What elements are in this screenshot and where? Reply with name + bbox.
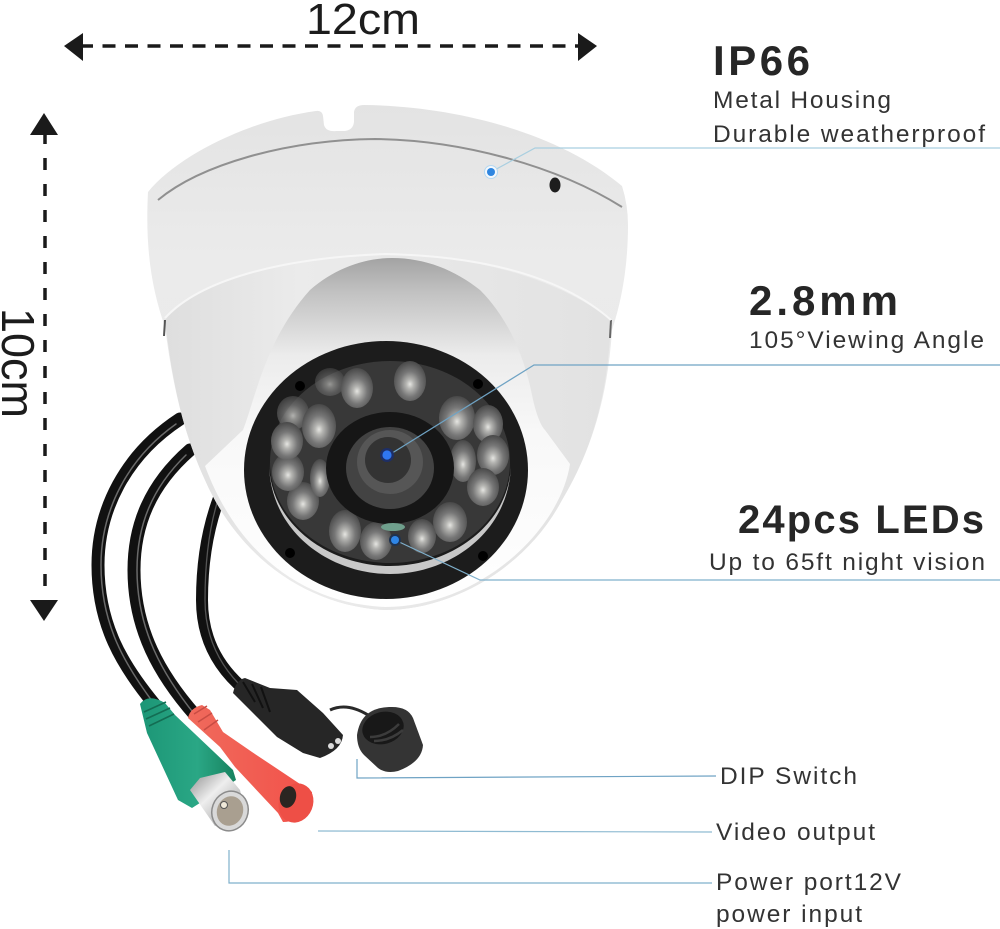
callout: IP66 metal housing: [484, 37, 1000, 178]
callout: IP66 metal housing: IP66: [713, 37, 810, 84]
connector: green BNC: [140, 698, 254, 836]
dimension: width 12cm: [64, 0, 597, 61]
groove: [158, 139, 622, 207]
cables: [98, 419, 245, 715]
camera: dome housing: [147, 105, 628, 610]
outer housing silhouette: [147, 105, 628, 610]
callout: 24pcs LEDs: [389, 498, 1000, 580]
callout: 2.8mm lens: 105°Viewing Angle: [749, 327, 984, 354]
callout: power port: Power port12V: [716, 869, 902, 896]
callout: 24pcs LEDs: Up to 65ft night vision: [709, 549, 985, 576]
callout: DIP switch: DIP Switch: [720, 763, 857, 790]
callout: IP66 metal housing: Durable weatherproof: [713, 121, 985, 148]
connector: red power jack: [188, 705, 319, 828]
lower ring: [165, 254, 611, 610]
callout: 2.8mm lens: [380, 277, 1000, 462]
callout: power port: [229, 850, 902, 928]
connector: black DC plug with rubber cap: [233, 678, 423, 772]
lens: [326, 412, 454, 524]
LEDs: [271, 361, 509, 560]
rubber cap: [357, 707, 423, 772]
ring shadow edge: [164, 320, 165, 336]
dimension: height 10cm: [0, 113, 58, 621]
screw hole: [550, 178, 560, 192]
camera: bezel and lens: [244, 341, 528, 599]
callout: DIP switch: [357, 759, 857, 790]
callout: 24pcs LEDs: 24pcs LEDs: [738, 498, 984, 542]
callout: power port: power input: [716, 901, 862, 928]
ball: [205, 258, 570, 607]
callout: IP66 metal housing: Metal Housing: [713, 87, 891, 114]
callout: 2.8mm lens: 2.8mm: [749, 277, 898, 324]
callout: video output: Video output: [716, 819, 875, 846]
black bezel: [244, 341, 528, 599]
